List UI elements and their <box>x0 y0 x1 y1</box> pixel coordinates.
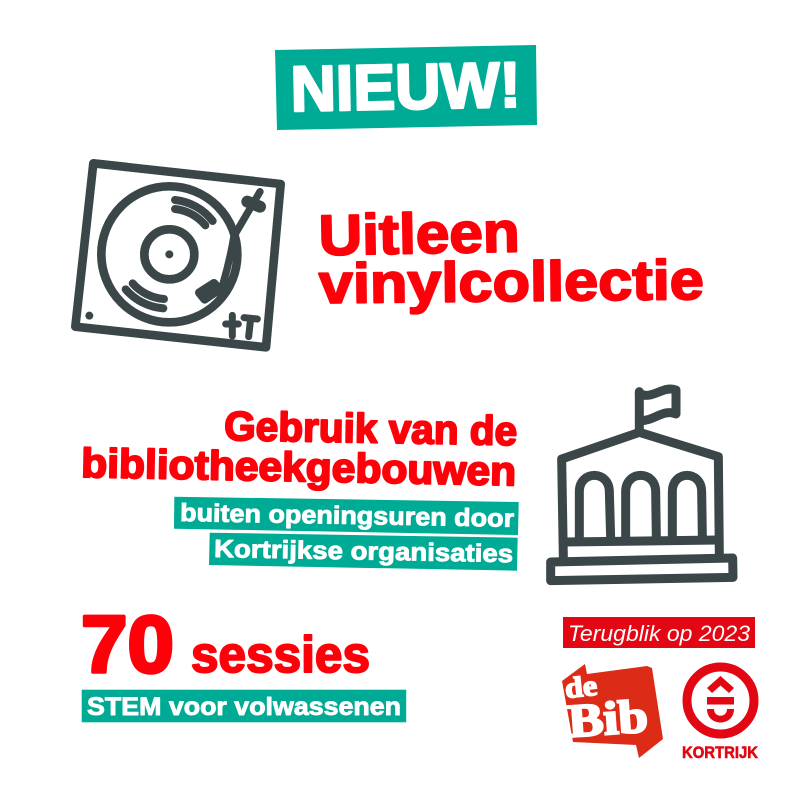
logo: de Bib: Bib <box>566 691 650 748</box>
stat: 70 sessies <box>81 600 370 690</box>
stat: 70 sessies: sessies <box>191 626 370 683</box>
icon: turntable <box>75 163 281 347</box>
heading: Uitleen vinylcollectie: Uitleen <box>318 200 520 268</box>
heading: Uitleen vinylcollectie <box>318 200 704 315</box>
label: Kortrijkse organisaties: Kortrijkse organisaties <box>214 535 513 568</box>
heading: Gebruik van de bibliotheekgebouwen: Gebruik van de <box>224 403 518 454</box>
stat: 70 sessies: 70 <box>81 600 174 690</box>
logo: Kortrijk: KORTRIJK <box>682 743 759 762</box>
heading: Uitleen vinylcollectie: vinylcollectie <box>318 248 704 315</box>
logo: de Bib <box>562 664 663 758</box>
label: buiten openingsuren door: buiten openingsuren door <box>180 499 515 533</box>
label: Terugblik op 2023: Terugblik op 2023 <box>568 621 751 646</box>
logo: de Bib: de <box>563 670 599 705</box>
heading: Gebruik van de bibliotheekgebouwen: bibliotheekgebouwen <box>81 440 517 494</box>
heading: Gebruik van de bibliotheekgebouwen <box>81 403 518 494</box>
icon: library building <box>551 389 733 581</box>
label: STEM voor volwassenen: STEM voor volwassenen <box>87 693 401 721</box>
badge: NIEUW!: NIEUW! <box>290 49 521 125</box>
logo: Kortrijk <box>682 667 759 762</box>
